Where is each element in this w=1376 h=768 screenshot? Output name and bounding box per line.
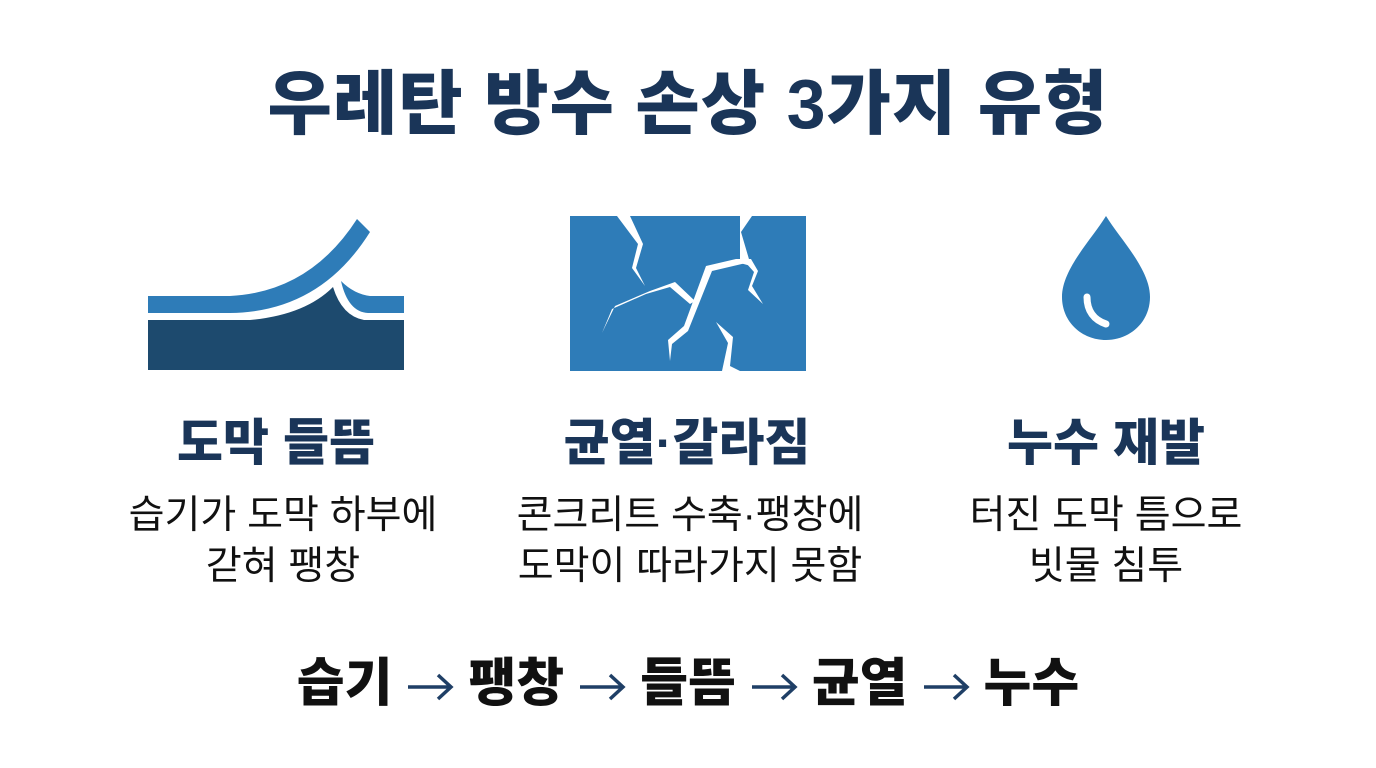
heading: peeling: 도막 들뜸 bbox=[177, 415, 375, 471]
icon: water drop bbox=[1062, 216, 1150, 340]
heading: crack: 균열·갈라짐 bbox=[564, 415, 810, 471]
text: leak desc bbox=[970, 494, 1242, 588]
text: peeling desc: 갇혀 팽창 bbox=[206, 545, 360, 588]
icon: peeling membrane bbox=[148, 219, 404, 370]
heading: leak: 누수 재발 bbox=[1007, 415, 1205, 471]
text: peeling desc bbox=[129, 494, 437, 588]
text: leak desc: 빗물 침투 bbox=[1029, 545, 1183, 588]
flow: damage process: 습기 팽창 들뜸 균열 누수 bbox=[297, 655, 1079, 713]
text: peeling desc: 습기가 도막 하부에 bbox=[129, 494, 437, 537]
text: crack desc bbox=[517, 494, 863, 588]
text: crack desc: 도막이 따라가지 못함 bbox=[518, 545, 862, 588]
title: 우레탄 방수 손상 3가지 유형 bbox=[267, 65, 1109, 143]
icon: cracked concrete bbox=[570, 216, 806, 371]
text: leak desc: 터진 도막 틈으로 bbox=[970, 494, 1242, 537]
text: crack desc: 콘크리트 수축·팽창에 bbox=[517, 494, 863, 537]
